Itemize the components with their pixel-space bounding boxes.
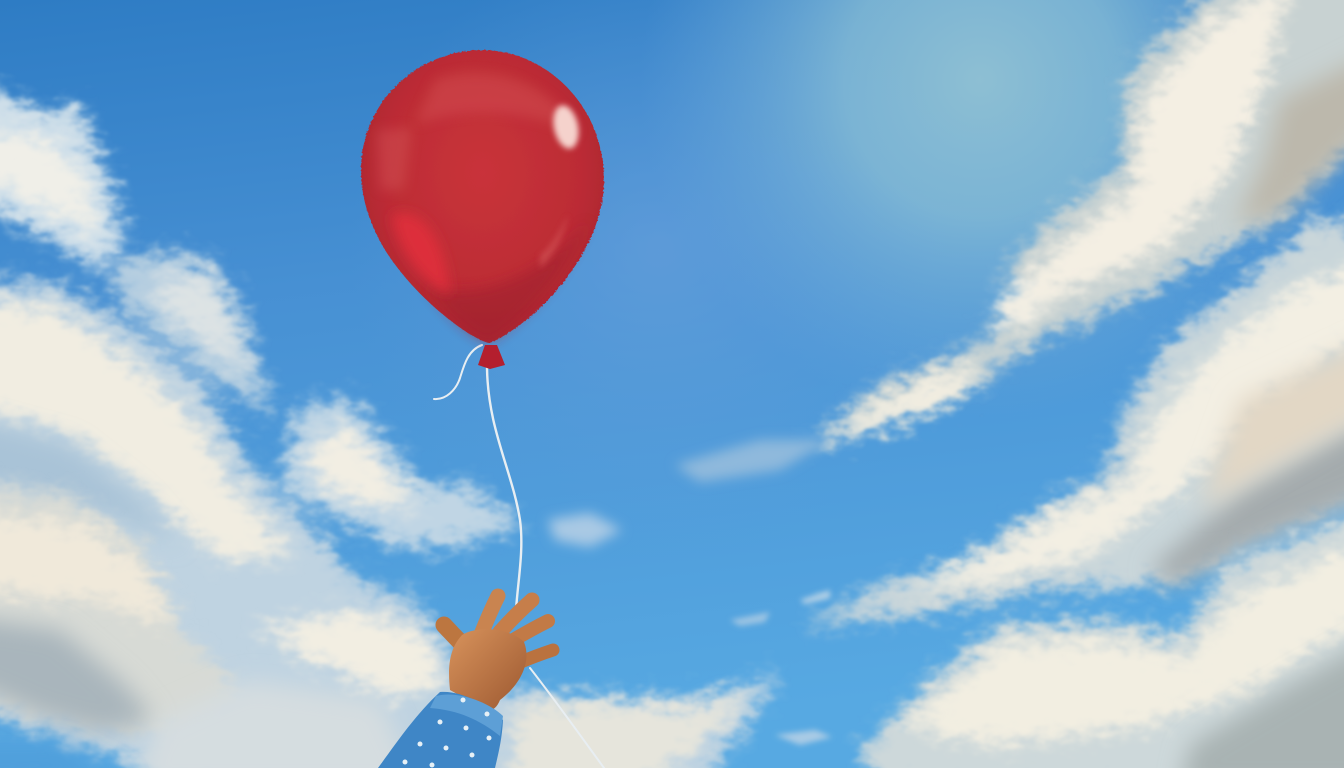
cloud: upper right streak bbox=[675, 0, 1344, 482]
red balloon bbox=[361, 50, 604, 343]
balloon body bbox=[361, 50, 604, 343]
balloon dark lower shade bbox=[425, 220, 588, 342]
child's hand bbox=[444, 596, 553, 710]
blue polka dot sleeve bbox=[378, 692, 503, 768]
thumb bbox=[444, 625, 470, 652]
cloud: lower right bank bbox=[730, 505, 1344, 768]
balloon highlight bbox=[550, 103, 582, 151]
cloud: right middle band bbox=[805, 215, 1344, 625]
sleeve polka dots bbox=[402, 698, 492, 768]
cloud: centre puff bbox=[285, 395, 622, 548]
balloon string bbox=[434, 345, 604, 768]
palm and wrist bbox=[449, 629, 527, 710]
cloud: lower left bank bbox=[0, 610, 755, 768]
cloud: upper left wisps bbox=[0, 70, 272, 415]
balloon upper sheen bbox=[415, 73, 580, 135]
little finger bbox=[516, 650, 553, 664]
middle finger bbox=[500, 600, 532, 632]
index finger bbox=[482, 596, 498, 632]
cloud: large left mass bbox=[0, 275, 780, 768]
balloon left reflection bbox=[392, 213, 450, 295]
ring finger bbox=[510, 621, 548, 642]
balloon knot bbox=[478, 345, 505, 369]
